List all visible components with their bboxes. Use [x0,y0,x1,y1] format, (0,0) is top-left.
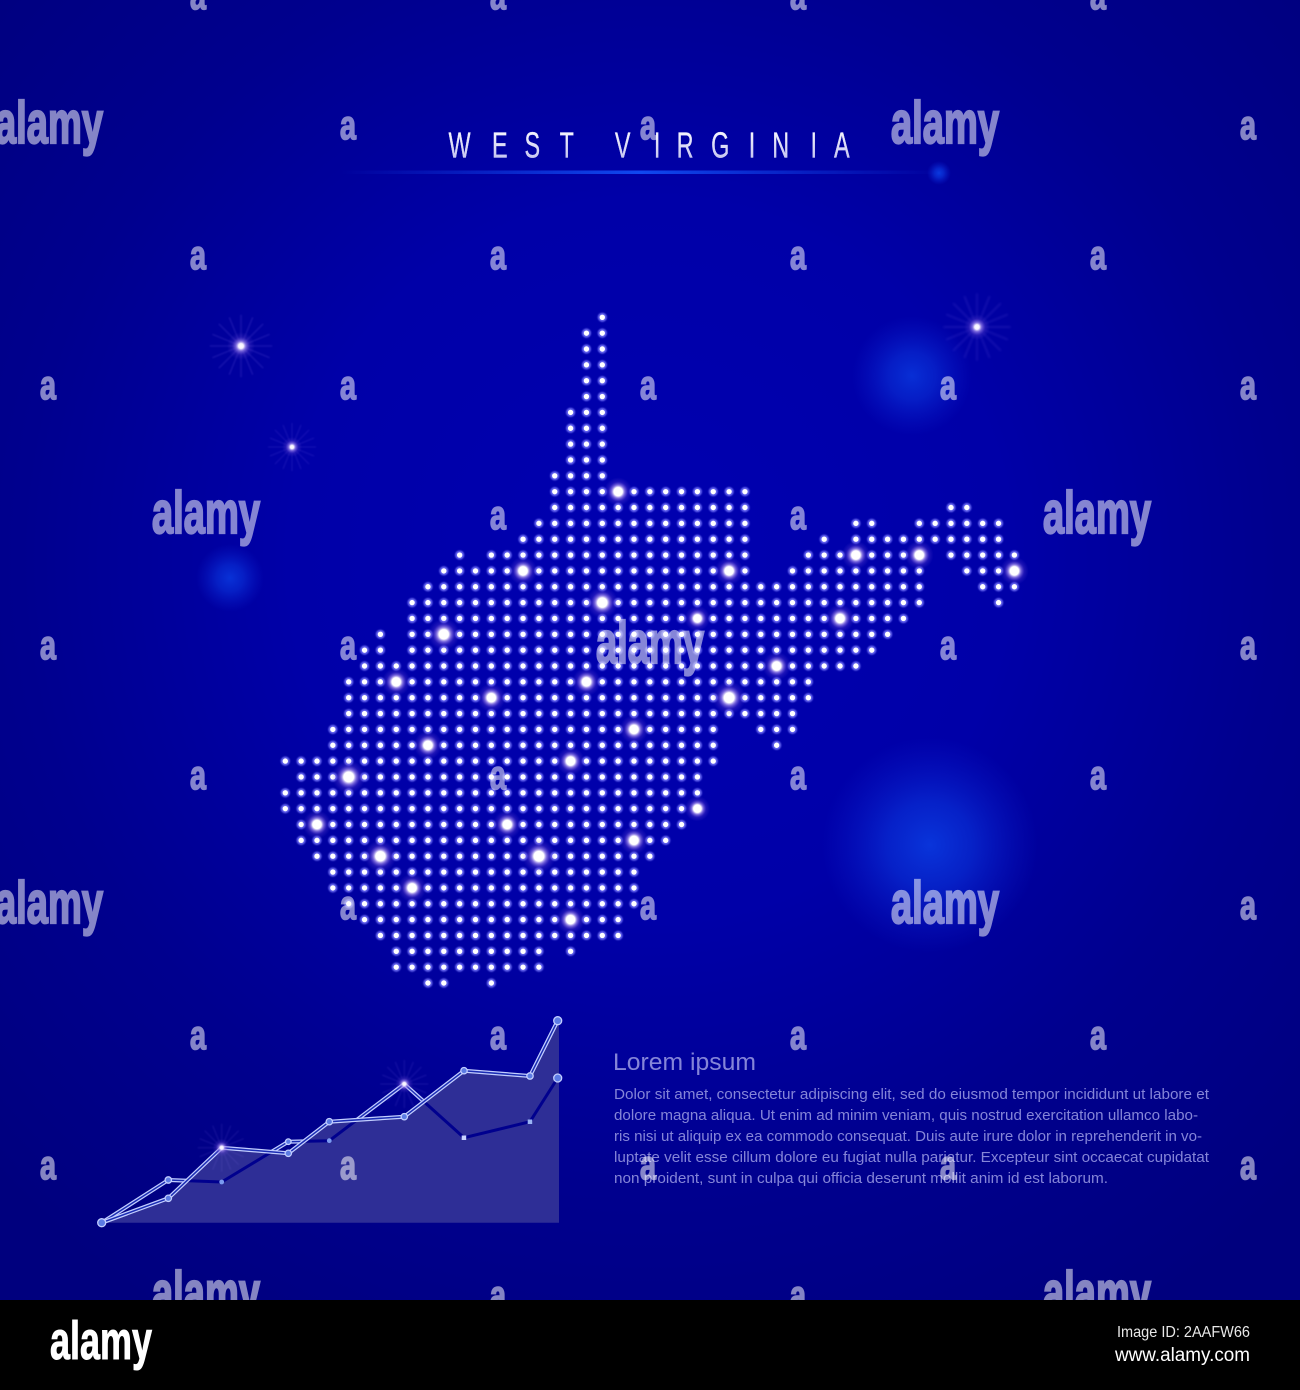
watermark letters: a [340,362,357,408]
body text: Dolor sit amet, consectetur adipiscing elit, sed do eiusmod tempor incididunt ut labore et [614,1087,1209,1103]
watermark letters: a [640,1142,657,1188]
watermark letters: a [340,882,357,928]
glow: upper right [852,316,972,436]
series B inside area [188,1081,556,1184]
watermark letters: a [1240,882,1257,928]
watermark letters: a [790,1272,807,1318]
watermark letters: a [1090,1012,1107,1058]
watermark words: alamy [152,480,260,546]
chart markers [98,1017,562,1227]
watermark letters: a [1240,622,1257,668]
watermark words: alamy [0,90,103,156]
watermark words: alamy [891,870,999,936]
watermark letters: a [790,752,807,798]
footer bar [0,1300,1300,1390]
watermark letters: a [790,232,807,278]
watermark letters: a [340,1142,357,1188]
watermark letters: a [1090,752,1107,798]
watermark letters: a [1240,102,1257,148]
watermark letters: a [940,1142,957,1188]
text heading: Lorem ipsum: Lorem ipsum [613,1049,756,1076]
body text [614,1087,1209,1187]
watermark letters: a [190,752,207,798]
watermark letters: a [190,232,207,278]
watermark letters: a [340,102,357,148]
body text: non proident, sunt in culpa qui officia deserunt mollit anim id est laborum. [614,1171,1108,1187]
footer logo: alamy [50,1311,152,1371]
body text: ris nisi ut aliquip ex ea commodo consequat. Duis aute irure dolor in reprehenderit in vo- [614,1129,1202,1145]
watermark letters: a [940,622,957,668]
watermark letters: a [490,492,507,538]
watermark letters: a [340,622,357,668]
watermark letters: a [640,362,657,408]
watermark words [0,90,1151,1326]
watermark words: alamy [0,870,103,936]
body text: luptate velit esse cillum dolore eu fugiat nulla pariatur. Excepteur sint occaecat cupidatat [614,1150,1209,1166]
image id: Image ID: 2AAFW66 [1117,1324,1250,1341]
glow: left [196,544,264,612]
chart area [102,1021,559,1223]
watermark letters: a [1240,1142,1257,1188]
watermark words: alamy [891,90,999,156]
title: WEST VIRGINIA [449,127,850,166]
watermark letters: a [790,492,807,538]
bright map points [303,477,1029,934]
watermark words: alamy [1043,1260,1151,1326]
title underline beam [340,161,951,185]
glow: lower right [822,737,1038,953]
series B outline above area [102,1078,558,1223]
watermark letters: a [1090,232,1107,278]
star: upper right [943,293,1011,361]
watermark words: alamy [152,1260,260,1326]
watermark letters: a [640,882,657,928]
watermark letters: a [1240,362,1257,408]
watermark letters: a [490,1272,507,1318]
watermark letters: a [790,1012,807,1058]
chart highlight points [198,1060,428,1172]
website: www.alamy.com [1114,1345,1250,1366]
line chart [98,1017,562,1227]
body text: dolore magna aliqua. Ut enim ad minim veniam, quis nostrud exercitation ullamco labo- [614,1108,1198,1124]
watermark letters: a [640,102,657,148]
star: upper left [210,315,272,377]
watermark words: alamy [1043,480,1151,546]
watermark letters: a [40,622,57,668]
watermark letters: a [190,1012,207,1058]
watermark letters: a [490,232,507,278]
dotted map: West Virginia [285,317,1029,983]
watermark letters: a [40,1142,57,1188]
inner markers [219,1120,532,1184]
watermark letters: a [490,1012,507,1058]
star: left [268,423,316,471]
watermark words: alamy [596,610,704,676]
watermark letters: a [40,362,57,408]
watermark letters: a [940,362,957,408]
watermark letters: a [490,752,507,798]
series A line [102,1021,558,1223]
